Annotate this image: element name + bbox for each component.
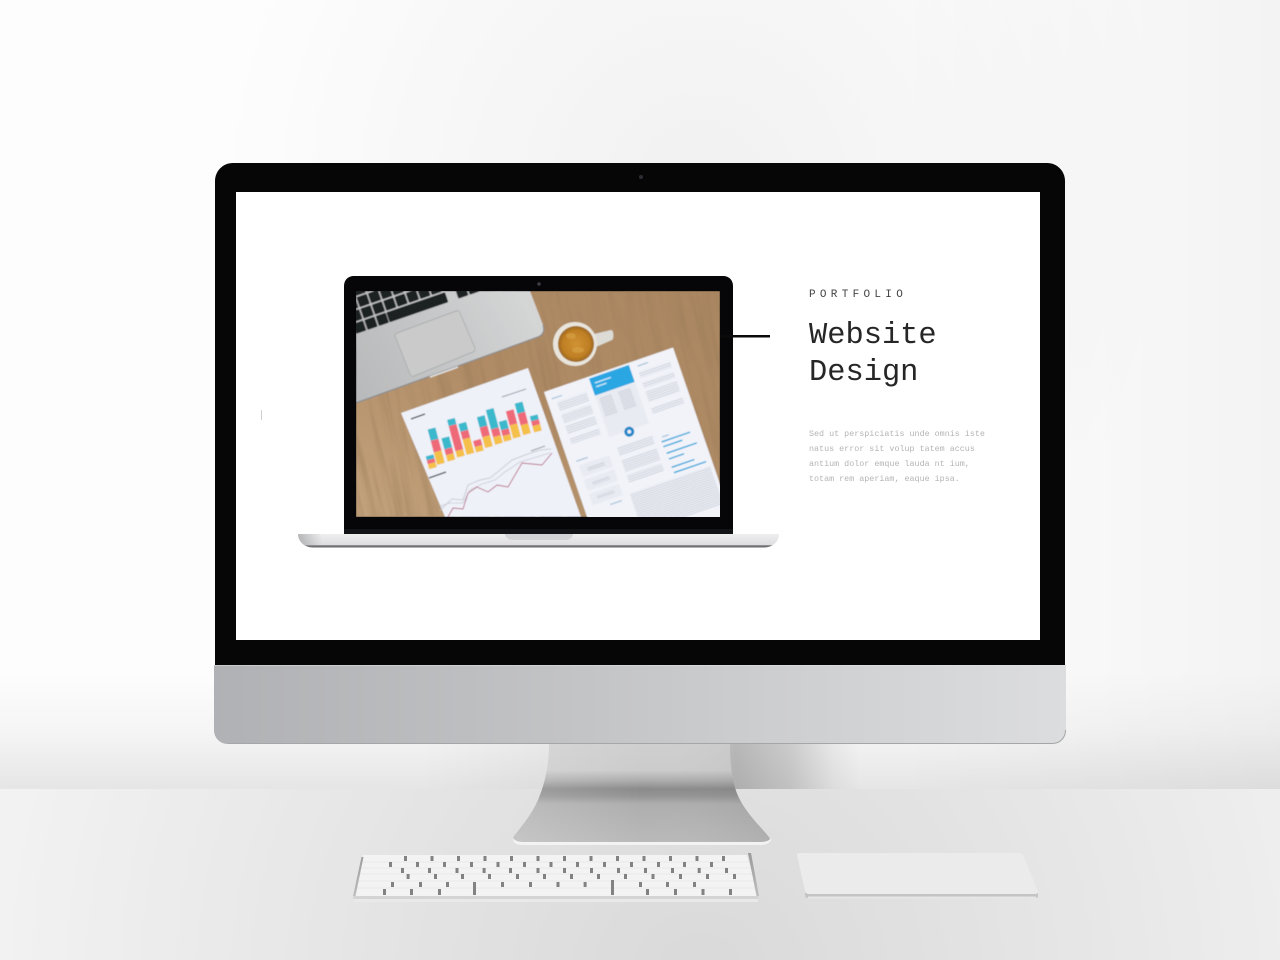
wall shade above desk: [0, 670, 1280, 790]
laptop base: [298, 534, 779, 548]
trackpad lower lip: [808, 896, 1036, 898]
laptop notch: [505, 534, 573, 540]
monitor: [214, 163, 1066, 744]
keyboard front edge: [353, 896, 759, 899]
eyebrow: portfolio: PORTFOLIO: [809, 289, 907, 301]
webcam: [639, 175, 643, 179]
space bar: [386, 292, 448, 322]
wood grain: [356, 291, 720, 517]
monitor chin: [214, 665, 1066, 744]
keyboard body: [353, 855, 759, 899]
background: desk: [0, 789, 1280, 960]
line chart: [440, 449, 552, 517]
chart titles: [411, 414, 446, 478]
left column boxes: [579, 455, 623, 505]
trackpad in photo: [395, 311, 475, 376]
key rows: [356, 291, 446, 322]
laptop edge: [356, 325, 544, 403]
trackpad top: [797, 853, 1038, 894]
bottom row left keys: [356, 312, 390, 334]
cup rim: [553, 322, 597, 366]
body text: antium dolor emque lauda nt ium,: [809, 459, 970, 469]
cup handle: [594, 330, 613, 347]
paper sheet: [543, 347, 720, 517]
title: website design: Website: [809, 319, 937, 353]
keyboard side edges: [353, 853, 759, 896]
stand body: [513, 744, 770, 844]
body text: Sed ut perspiciatis unde omnis iste: [809, 429, 985, 439]
coffee foam: [566, 333, 584, 353]
key row lines: [356, 862, 755, 888]
coffee: [558, 326, 594, 362]
stacked bar chart: [426, 402, 542, 469]
chart legends: [502, 389, 545, 451]
laptop mockup: [298, 276, 779, 548]
name text lines: [595, 377, 612, 387]
slide screen: [236, 192, 1040, 640]
small slide mark: [261, 410, 262, 420]
chin bottom edge: [228, 730, 1066, 744]
left report paper: [401, 368, 581, 517]
laptop base end shading: [298, 534, 322, 545]
skill bars: [662, 430, 706, 473]
paper sheet: [401, 368, 581, 517]
key gaps: [383, 856, 736, 895]
laptop lid: [344, 276, 733, 534]
monitor bezel: [215, 163, 1065, 665]
stand base rim: [513, 838, 771, 845]
keyboard: [353, 853, 759, 902]
keyboard shadow: [354, 899, 758, 902]
title: website design: Design: [809, 356, 918, 390]
hinge notch: [430, 367, 458, 377]
red trend line: [448, 453, 552, 517]
round icon: [624, 426, 635, 438]
laptop body in photo: [356, 291, 544, 403]
wall glow behind monitor: [0, 0, 1280, 670]
chin top highlight: [214, 665, 1066, 666]
monitor stand: [513, 744, 771, 845]
connector line: [720, 335, 770, 338]
laptop webcam: [537, 282, 541, 286]
body text: natus error sit volup tatem accus: [809, 444, 975, 454]
trackpad side: [805, 893, 1038, 898]
wooden desk: [356, 291, 720, 517]
laptop photo: [356, 291, 720, 517]
bottom row right keys: [455, 291, 482, 299]
text blocks: [558, 362, 720, 517]
blue name box: [589, 365, 635, 396]
stand shadow on wall: [420, 744, 860, 789]
section labels: [551, 362, 670, 506]
icon glyph: [627, 429, 632, 434]
stand side light: [513, 744, 770, 844]
keyboard in photo: [356, 291, 482, 334]
body text: totam rem aperiam, eaque ipsa.: [809, 474, 960, 484]
sidebar tint: [594, 380, 649, 437]
coffee cup: [553, 322, 613, 366]
lid bottom band: [344, 529, 733, 534]
right resume paper: [543, 347, 720, 517]
trackpad: [797, 853, 1038, 898]
